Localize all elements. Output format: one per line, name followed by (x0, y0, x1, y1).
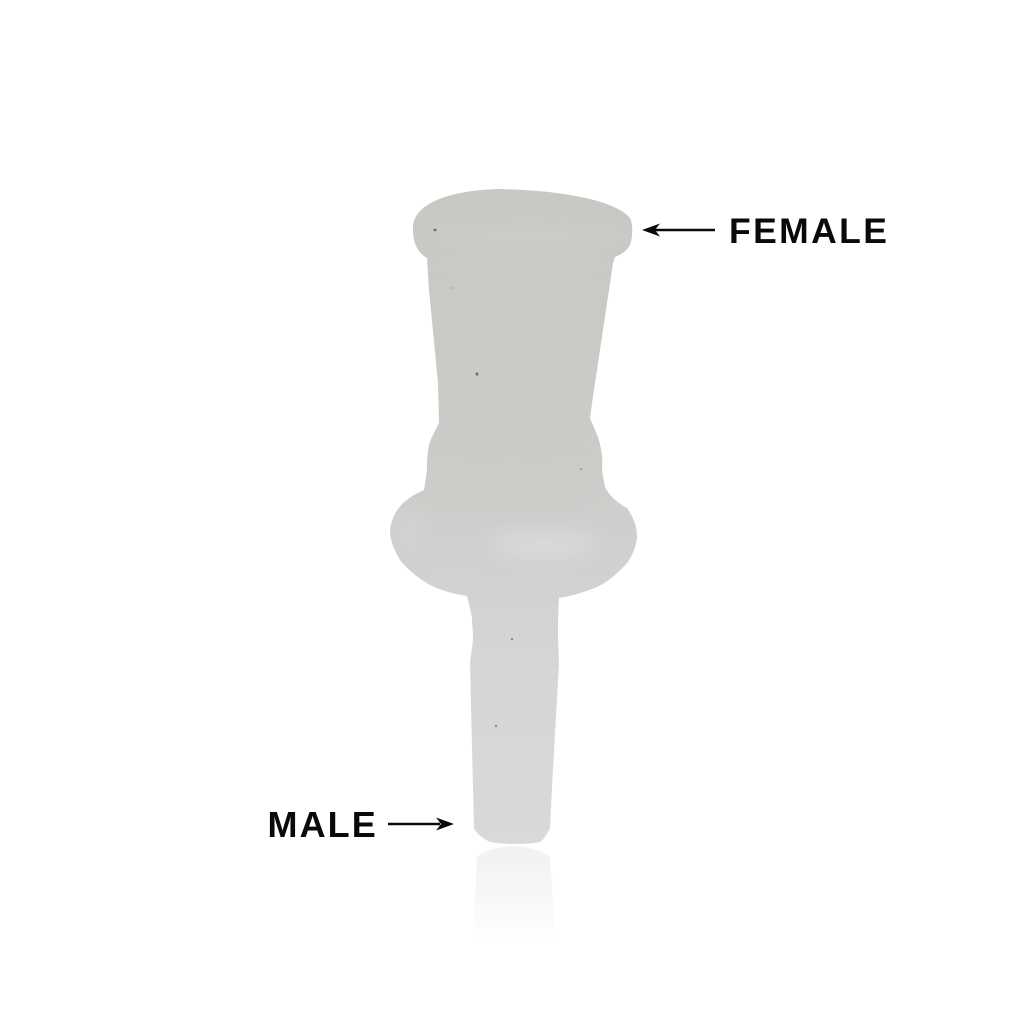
label: female (642, 211, 889, 251)
arrow: points to female end (642, 224, 715, 236)
embossed logo marks (521, 341, 570, 408)
surface specks (433, 229, 582, 727)
female text: FEMALE (729, 211, 889, 251)
label: male (268, 804, 454, 845)
male text: MALE (268, 804, 378, 845)
adapter body silhouette (390, 189, 637, 844)
arrow: points to male end (388, 818, 454, 830)
glass adapter joint (390, 189, 637, 844)
adapter reflection (473, 846, 555, 937)
frosted shading (514, 225, 655, 552)
